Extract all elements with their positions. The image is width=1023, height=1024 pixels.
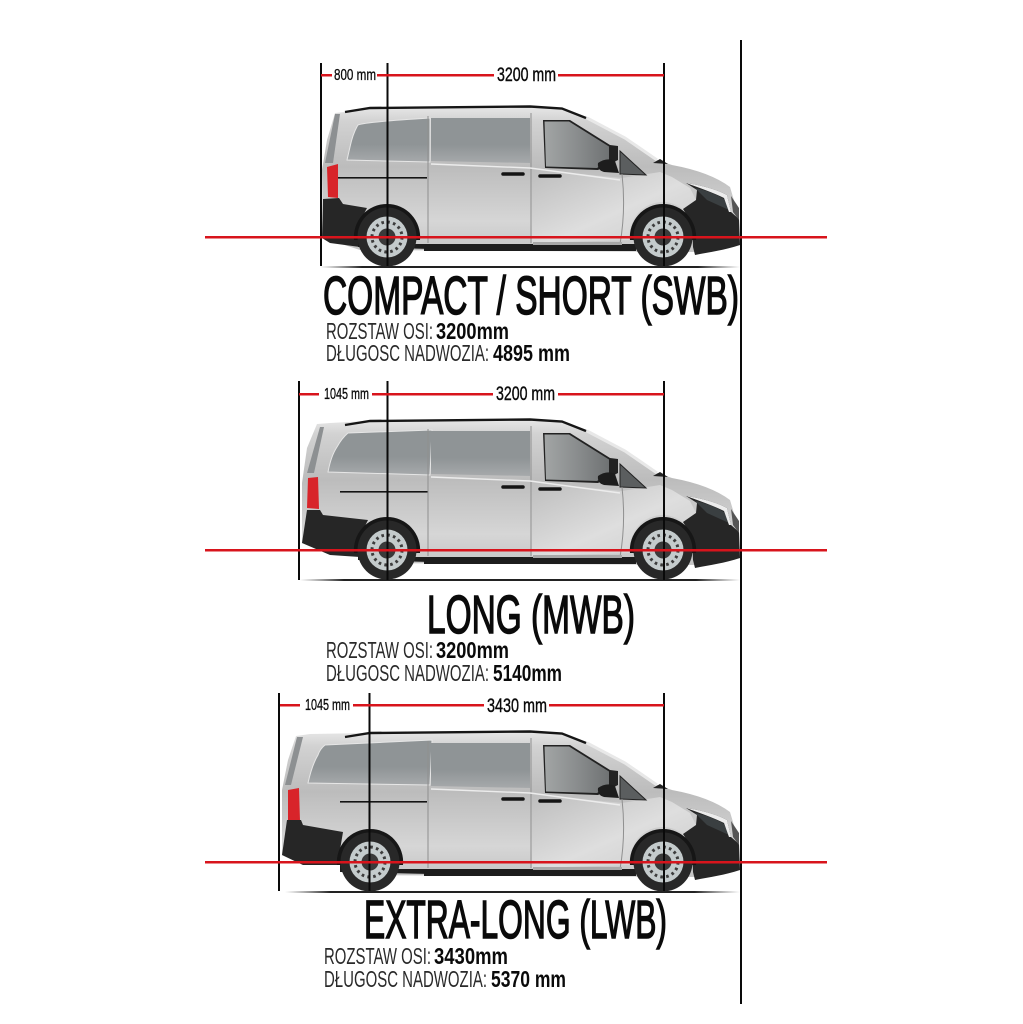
van 3 ground shadow <box>285 891 740 893</box>
van 1: compact short wheelbase <box>320 106 740 268</box>
van 1 rear door glass <box>325 114 340 163</box>
van 3 sill <box>340 865 430 874</box>
van 1 side rub strip <box>338 177 427 179</box>
spec block van 3: ROZSTAW OSI: <box>324 943 431 969</box>
spec block van 1: 4895 mm <box>493 340 570 366</box>
van 2 tail light <box>307 477 319 509</box>
spec block van 3 <box>324 943 566 992</box>
dimension lines van 1 <box>205 63 827 266</box>
heading: long: LONG (MWB) <box>427 585 635 645</box>
spec block van 2 <box>326 637 562 686</box>
spec block van 1: ROZSTAW OSI: <box>326 318 433 344</box>
spec block van 3: 5370 mm <box>491 966 566 992</box>
van 3 rear door glass <box>285 737 303 785</box>
van 3 rear bumper <box>282 820 343 865</box>
dimension label 3430 mm: 3430 mm <box>487 695 547 717</box>
dimension label 800 mm: 800 mm <box>334 67 376 84</box>
dimension label 3200 mm: 3200 mm <box>497 64 556 86</box>
van 1 front section <box>345 106 740 266</box>
van 1 rear bumper <box>322 198 367 247</box>
van 1 cab panel <box>532 169 696 243</box>
van 2: long medium wheelbase <box>300 420 740 581</box>
van 3: extra long wheelbase <box>282 732 740 893</box>
van 3 tail light <box>288 788 300 821</box>
van 3 cab panel <box>532 794 696 868</box>
van 3 rear wheel <box>340 832 400 892</box>
van 3 rear wheel arch <box>337 829 403 865</box>
van 1 rear wheel arch <box>354 204 420 240</box>
spec block van 1 <box>326 318 570 366</box>
dimension lines van 2 <box>205 381 827 580</box>
van 2 side rub strip <box>340 491 428 493</box>
van 2 rear window <box>328 430 432 475</box>
spec block van 3: DŁUGOSC NADWOZIA: <box>324 966 487 992</box>
van 2 rear bumper <box>302 510 368 557</box>
van 2 front section <box>345 420 740 580</box>
van 1 ground shadow <box>320 266 740 268</box>
heading: extra long: EXTRA-LONG (LWB) <box>364 890 667 950</box>
van 3 body <box>282 732 740 877</box>
van 2 rear wheel arch <box>354 517 420 553</box>
front datum vertical line <box>740 40 742 1004</box>
van 2 sill <box>358 553 430 562</box>
dimension lines van 3 <box>205 693 827 891</box>
spec block van 3: 3430mm <box>434 943 508 969</box>
van 2 rear door glass <box>307 427 324 473</box>
spec block van 2: 5140mm <box>493 660 562 686</box>
van 2 body <box>302 420 740 565</box>
dimension label 1045 mm: 1045 mm <box>324 386 369 403</box>
dimension label 3200 mm: 3200 mm <box>496 383 555 405</box>
van 2 ground shadow <box>300 579 740 581</box>
spec block van 2: 3200mm <box>436 637 509 663</box>
dimension label 1045 mm: 1045 mm <box>305 697 350 714</box>
spec block van 2: ROZSTAW OSI: <box>326 637 433 663</box>
van 1 rear wheel <box>358 208 416 266</box>
van 2 rear wheel <box>358 520 416 580</box>
van 1 body <box>322 107 740 252</box>
van 1 rear window <box>347 118 430 162</box>
van 3 rear window <box>308 740 432 785</box>
spec block van 2: DŁUGOSC NADWOZIA: <box>326 660 489 686</box>
van 3 side rub strip <box>340 801 427 803</box>
van 3 front section <box>345 732 740 892</box>
spec block van 1: 3200mm <box>436 318 509 344</box>
heading: compact short: COMPACT / SHORT (SWB) <box>323 266 739 326</box>
van 2 cab panel <box>532 482 696 556</box>
van 1 tail light <box>327 164 338 198</box>
van 1 sill <box>358 240 430 249</box>
spec block van 1: DŁUGOSC NADWOZIA: <box>326 340 489 366</box>
